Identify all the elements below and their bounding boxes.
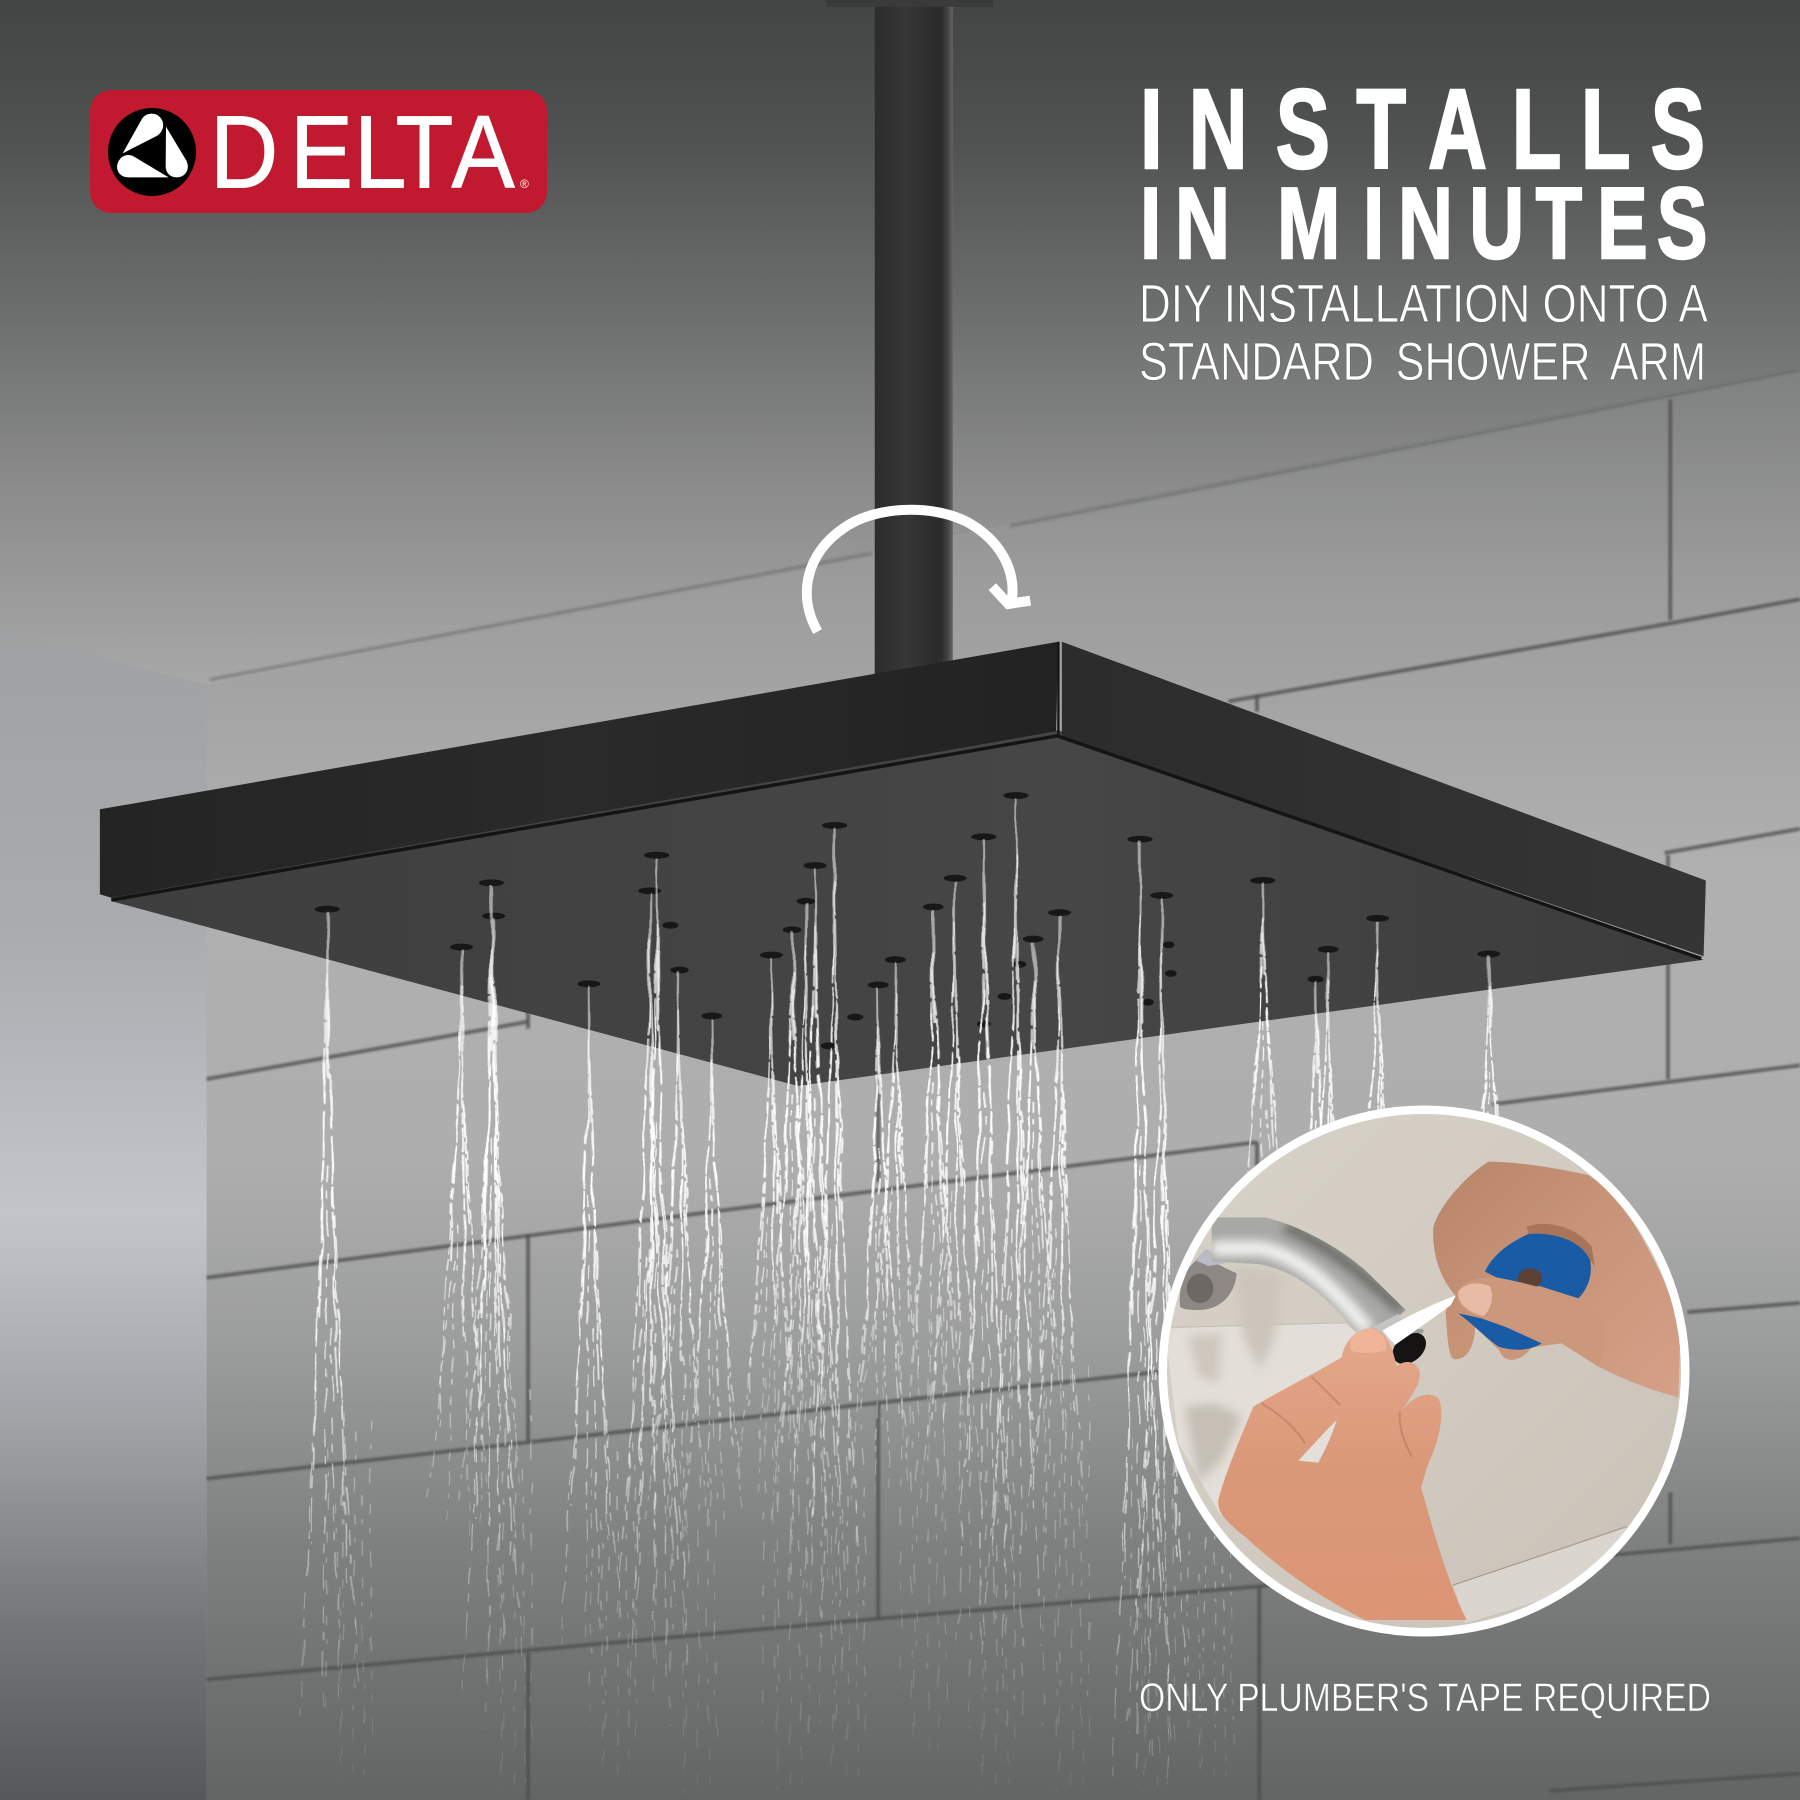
arm dark reflection (1285, 1227, 1402, 1310)
threaded fitting (1374, 1314, 1403, 1336)
headline line one: INSTALLS (1140, 66, 1705, 192)
DELTA wordmark: DELTA (210, 94, 515, 209)
edge shadows (111, 642, 1701, 959)
ceiling junction line (210, 370, 1800, 680)
arm highlight (1212, 1248, 1368, 1330)
black fitting cap (1392, 1332, 1426, 1364)
blue tape roll, lower part (1458, 1313, 1542, 1350)
right hand holding tape (1433, 1162, 1680, 1397)
caption: ONLY PLUMBER'S TAPE REQUIRED (1139, 1676, 1711, 1720)
white plumber's tape (1382, 1296, 1456, 1345)
left thumbnail (1350, 1329, 1386, 1353)
wall shadows (1240, 1272, 1278, 1366)
water streams falling from the nozzles (300, 799, 1520, 1791)
headline (1140, 66, 1707, 280)
left-hand creases (1262, 1377, 1412, 1457)
Delta logo badge (90, 90, 547, 213)
spray nozzles (315, 792, 1500, 1049)
blue tape roll, upper part (1485, 1234, 1591, 1298)
silver shower arm (1212, 1218, 1406, 1332)
ceiling (0, 0, 1800, 684)
left side face (100, 642, 1058, 898)
photo contents (1167, 1114, 1681, 1628)
headline line two: IN MINUTES (1140, 166, 1707, 280)
inset photo: hands wrapping plumber's tape on shower arm (1150, 1100, 1700, 1650)
gap between thumb and finger (1298, 1420, 1337, 1463)
black circle emblem (108, 108, 196, 196)
right side face (1062, 642, 1706, 956)
rotation arrow around the shower arm (807, 510, 1030, 632)
lower-right tile (1453, 1527, 1627, 1623)
left hand holding fitting (1218, 1328, 1467, 1620)
tape roll hole (1518, 1268, 1542, 1288)
tile grout lines (207, 399, 1800, 1800)
registered mark: ® (520, 177, 529, 191)
rain shower head (100, 642, 1706, 1086)
underside plate (111, 730, 1704, 1086)
white triangle petals (117, 114, 188, 177)
fingers wrapping over the roll (1527, 1224, 1595, 1267)
thumb of right hand (1457, 1277, 1604, 1367)
red rounded badge (90, 90, 547, 213)
tiled back wall (207, 367, 1800, 1800)
chrome flange (1180, 1257, 1237, 1310)
white ring (1158, 1106, 1690, 1636)
white lower-left tile (1168, 1324, 1356, 1516)
subheading (1139, 275, 1708, 392)
right thumbnail (1458, 1283, 1492, 1316)
shower arm (827, 0, 993, 677)
left side wall (0, 629, 207, 1800)
beige wall (1167, 1114, 1681, 1628)
